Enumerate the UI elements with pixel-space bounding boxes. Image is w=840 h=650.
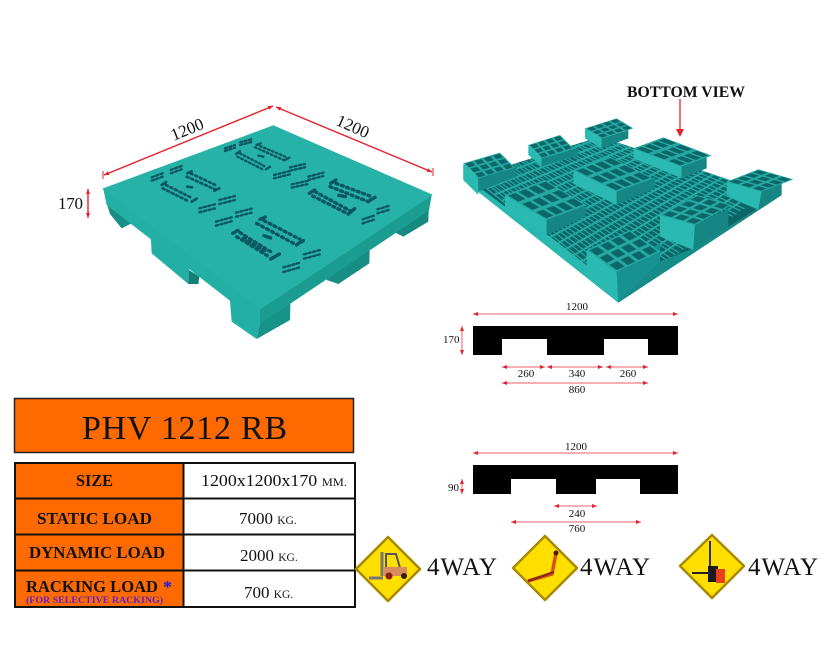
- label column: [15, 463, 183, 607]
- dimension 170: [443, 326, 462, 355]
- side profile 170: [443, 301, 678, 396]
- dimension 760: 760: [569, 523, 586, 535]
- dimension: top view width left: 1200: [168, 114, 207, 145]
- dimension: top view width left: [103, 106, 273, 179]
- title box: PHV 1212 RB: [82, 410, 287, 447]
- middle right foot: [325, 240, 370, 284]
- row: static load: 7000 KG.: [239, 509, 297, 528]
- dimension: top view width right: 1200: [333, 111, 372, 142]
- row: racking load: *: [163, 577, 172, 597]
- small hole groups: [152, 139, 391, 272]
- dimension: top view width right: [276, 107, 433, 176]
- dimension: top view height: 170: [58, 194, 83, 213]
- icon: walkie stacker sign with 4WAY: [680, 535, 818, 598]
- icon: pallet jack sign with 4WAY: 4WAY: [580, 554, 650, 581]
- dimensions 260 340 260: [502, 367, 648, 380]
- right rim: [618, 195, 782, 303]
- side profile 90: [448, 441, 678, 535]
- row: size: [76, 471, 347, 490]
- icon: walkie stacker sign with 4WAY: 4WAY: [748, 554, 818, 581]
- dimension 760: [511, 522, 641, 535]
- foot 4: [633, 137, 712, 178]
- foot 2: [528, 135, 578, 167]
- row: racking load: RACKING LOAD: [26, 577, 158, 596]
- perforation slots: [152, 139, 391, 272]
- row: racking load: (FOR SELECTIVE RACKING): [26, 595, 163, 606]
- deck left side: [103, 189, 260, 324]
- icon: forklift sign with 4WAY: [356, 537, 497, 601]
- row: size: SIZE: [76, 471, 113, 490]
- dimensions 260 340 260: 260: [518, 368, 535, 380]
- dimension 90: [448, 479, 462, 494]
- dimension 1200: 1200: [565, 441, 588, 453]
- rear left foot: [107, 203, 132, 228]
- slot cluster right: [309, 180, 375, 214]
- foot 8: [660, 195, 732, 250]
- deck top face: [103, 126, 432, 308]
- row: size: 1200x1200x170 MM.: [201, 471, 347, 490]
- arrow: bottom view: [676, 99, 684, 137]
- row: racking load: [26, 577, 293, 606]
- foot 1: [463, 153, 517, 195]
- icon: pallet jack sign with 4WAY: [513, 536, 650, 600]
- slot cluster front: [233, 217, 303, 259]
- pallet bottom view illustration: [463, 118, 794, 303]
- foot 3: [585, 118, 633, 148]
- foot 6: [727, 169, 793, 210]
- table grid: [15, 463, 355, 607]
- dimensions 260 340 260: 260: [620, 368, 637, 380]
- front foot: [229, 293, 291, 339]
- deck right side: [260, 195, 432, 324]
- dimension 240: 240: [569, 508, 586, 520]
- specification table: [15, 463, 355, 607]
- dimension 240: [554, 506, 597, 520]
- row: dynamic load: 2000 KG.: [240, 546, 298, 565]
- pallet top view illustration: [103, 126, 432, 339]
- foot 7: [505, 180, 587, 235]
- rear right foot: [393, 203, 429, 237]
- dimension: top view height: [58, 189, 88, 218]
- row: racking load: 700 KG.: [244, 583, 293, 602]
- dimension 90: 90: [448, 482, 460, 494]
- profile shape: [473, 326, 678, 355]
- foot 5: [573, 157, 655, 205]
- row: static load: [37, 509, 297, 528]
- icon: forklift sign with 4WAY: 4WAY: [427, 554, 497, 581]
- title box: [14, 398, 354, 452]
- slot cluster back: [236, 143, 289, 170]
- profile shape: [473, 465, 678, 494]
- left rim: [463, 167, 618, 303]
- row: dynamic load: DYNAMIC LOAD: [29, 543, 165, 562]
- row: dynamic load: [29, 543, 298, 565]
- underside grid: [464, 136, 782, 302]
- dimension 860: 860: [569, 384, 586, 396]
- row: static load: STATIC LOAD: [37, 509, 152, 528]
- bottom view label: BOTTOM VIEW: [627, 84, 746, 101]
- middle left foot: [150, 223, 199, 284]
- slot cluster left: [162, 171, 219, 202]
- dimension 170: 170: [443, 334, 460, 346]
- foot 9: [587, 230, 660, 303]
- dimension 1200: 1200: [566, 301, 588, 313]
- dimensions 260 340 260: 340: [569, 368, 586, 380]
